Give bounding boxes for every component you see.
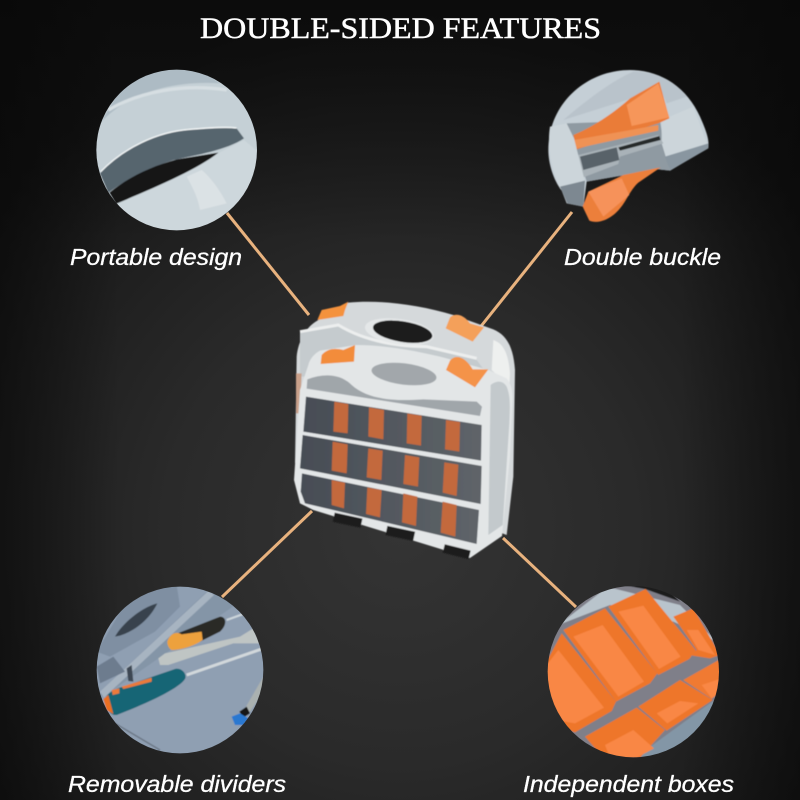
- compartment row 2: [300, 435, 482, 504]
- panel: removable dividers detail: [93, 582, 267, 755]
- label: Double buckle: Double buckle: [564, 244, 721, 270]
- panel: portable design detail: [93, 67, 260, 233]
- orange latch front left: [321, 345, 355, 364]
- label: Removable dividers: Removable dividers: [68, 771, 287, 797]
- label: Independent boxes: Independent boxes: [523, 771, 735, 797]
- back box: [295, 302, 515, 535]
- storage box G: [683, 658, 722, 699]
- orange latch back right: [446, 315, 484, 342]
- storage box D: [673, 608, 720, 658]
- compartment row 1: [303, 397, 482, 461]
- storage box B: [563, 608, 657, 702]
- title: DOUBLE-SIDED FEATURES: [200, 12, 601, 45]
- orange latch front right: [446, 357, 488, 387]
- storage box C: [608, 589, 696, 675]
- label: Portable design: Portable design: [70, 244, 242, 270]
- connector lines: [222, 212, 576, 607]
- central double-sided toolbox: [294, 302, 515, 559]
- storage box E: [638, 680, 713, 731]
- orange latch back left: [317, 302, 348, 320]
- orange dividers: [332, 402, 460, 537]
- buckle silhouette: [548, 70, 709, 207]
- storage box F: [585, 708, 665, 758]
- handle window: [370, 359, 438, 389]
- panel: independent boxes detail: [543, 582, 723, 762]
- front box: [294, 345, 512, 559]
- storage box A: [547, 633, 616, 732]
- bottom hinges: [333, 513, 471, 559]
- panel: double buckle detail: [548, 70, 709, 222]
- compartment row 3: [301, 473, 479, 544]
